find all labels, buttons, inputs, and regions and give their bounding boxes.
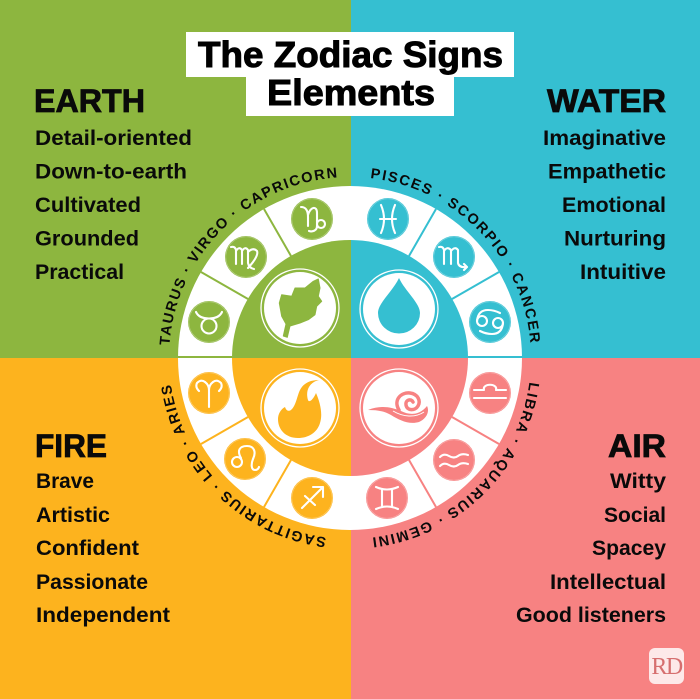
list: earth traits: Cultivated (35, 194, 141, 217)
list: water traits (543, 127, 666, 284)
list: earth traits: Practical (35, 261, 124, 284)
list: air traits (516, 470, 666, 627)
inner quadrants (232, 240, 468, 476)
list: water traits: Intuitive (580, 261, 666, 284)
title: Elements (267, 72, 435, 113)
list: fire traits (36, 470, 170, 627)
panel: fire (0, 358, 351, 699)
panel: air (351, 358, 700, 699)
heading: water: WATER (547, 83, 666, 119)
icon: sagittarius (291, 477, 333, 519)
list: air traits: Good listeners (516, 604, 666, 627)
title (186, 32, 514, 116)
heading: earth: EARTH (34, 83, 145, 119)
list: fire traits: Passionate (36, 571, 148, 594)
arc label: water signs: PISCES · SCORPIO · CANCER (371, 168, 540, 343)
list: fire traits: Artistic (36, 504, 110, 527)
list: water traits: Emotional (562, 194, 666, 217)
arc label: fire signs: SAGITTARIUS · LEO · ARIES (162, 386, 326, 547)
icon: aries (188, 372, 230, 414)
list: earth traits (35, 127, 192, 284)
list: water traits: Nurturing (564, 228, 666, 250)
icon: water drop (360, 270, 438, 348)
icon: capricorn (291, 198, 333, 240)
logo: RD (649, 648, 684, 684)
icon: leo (224, 438, 266, 480)
icon: gemini (366, 477, 408, 519)
icon: taurus (188, 301, 230, 343)
icon: leaf (261, 269, 339, 347)
panel: water (351, 0, 700, 358)
heading: fire: FIRE (35, 428, 107, 464)
list: air traits: Spacey (592, 537, 666, 560)
list: water traits: Imaginative (543, 127, 666, 150)
icon: pisces (367, 198, 409, 240)
arc label: earth signs: TAURUS · VIRGO · CAPRICORN (159, 168, 336, 345)
list: earth traits: Detail-oriented (35, 127, 192, 150)
white ring (178, 186, 522, 530)
arc label: air signs: LIBRA · AQUARIUS · GEMINI (373, 382, 540, 548)
icon: virgo (225, 236, 267, 278)
icon: flame (261, 369, 339, 447)
list: earth traits: Down-to-earth (35, 160, 187, 184)
zodiac wheel (159, 168, 540, 548)
list: air traits: Intellectual (550, 571, 666, 594)
heading: air: AIR (608, 428, 666, 464)
logo: RD: RD (651, 654, 683, 680)
list: earth traits: Grounded (35, 228, 139, 250)
list: fire traits: Confident (36, 537, 139, 560)
icon: scorpio (433, 236, 475, 278)
list: fire traits: Independent (36, 604, 170, 627)
list: air traits: Witty (610, 470, 666, 493)
list: water traits: Empathetic (548, 160, 666, 184)
icon: cancer (469, 301, 511, 343)
icon: aquarius (433, 439, 475, 481)
icon: libra (469, 372, 511, 414)
title: The Zodiac Signs (198, 34, 503, 75)
list: fire traits: Brave (36, 470, 94, 493)
panel: earth (0, 0, 351, 358)
list: air traits: Social (604, 504, 666, 527)
icon: wind swirl (360, 369, 438, 447)
